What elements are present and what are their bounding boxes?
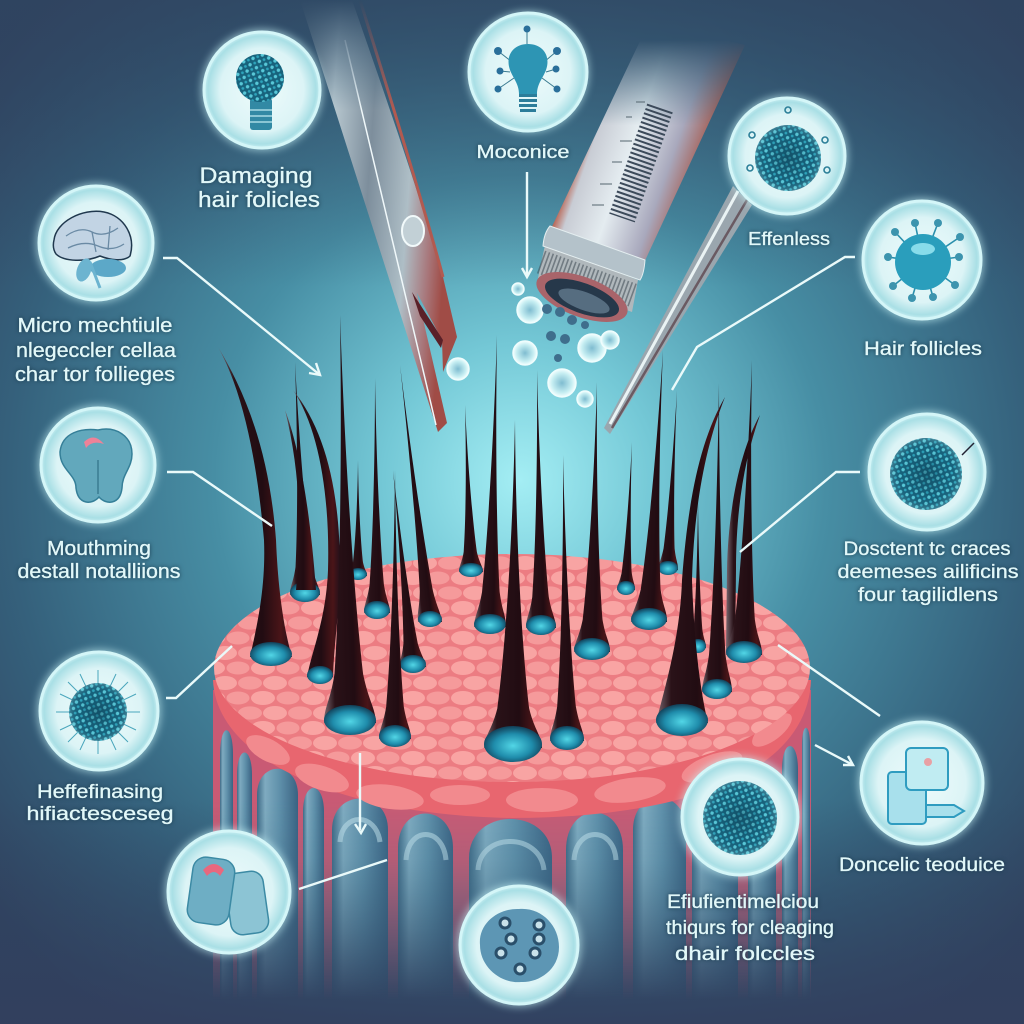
label: bottom centre text: Efiufientimelciou bbox=[667, 892, 819, 913]
callout: bulb-shaped fuzzy ball bbox=[201, 29, 323, 151]
callout: cell cluster bbox=[457, 883, 581, 1007]
label: left bottom text bbox=[26, 782, 174, 825]
icon: tissue lobes bbox=[60, 429, 132, 502]
label: micro molecule text bbox=[15, 315, 177, 386]
callout: fuzzy ball right bbox=[866, 411, 988, 533]
label: hair follicles: Hair follicles bbox=[864, 339, 982, 360]
label: bottom centre text: dhair folccles bbox=[675, 944, 815, 965]
label: mounting details: destall notalliions bbox=[18, 561, 180, 583]
syringe knurled nozzle bbox=[530, 245, 638, 332]
needle probe bbox=[604, 186, 752, 434]
label: micro molecule text: nlegeccler cellaa bbox=[16, 340, 177, 362]
icon: pads bbox=[186, 855, 270, 936]
label: right text block: four tagilidlens bbox=[858, 585, 998, 606]
callout: virus ball top right bbox=[726, 95, 848, 217]
icon: device bbox=[888, 748, 964, 824]
icon: fuzzy ball bbox=[890, 438, 974, 510]
icon: spiky ball bbox=[747, 107, 830, 191]
label: bottom centre text bbox=[666, 892, 834, 965]
label: right text block: deemeses ailificins bbox=[838, 562, 1018, 583]
icon: cell cluster bbox=[480, 909, 559, 982]
icon: sphere with nodes bbox=[884, 219, 964, 302]
icon: fuzzy bulb bbox=[236, 54, 284, 130]
label: micro molecule text: char tor follieges bbox=[15, 364, 175, 386]
icon: fuzzy ball bbox=[703, 781, 777, 855]
callout: pads bbox=[165, 828, 293, 956]
tweezers pivot bbox=[402, 216, 424, 246]
label: right text block: Dosctent tc craces bbox=[844, 539, 1010, 560]
callout: sphere with nodes bbox=[860, 198, 984, 322]
front row hairs bbox=[314, 315, 725, 762]
tweezers bbox=[300, 0, 457, 432]
syringe barrel bbox=[552, 44, 744, 260]
label: left bottom text: Heffefinasing bbox=[37, 782, 163, 803]
syringe bbox=[536, 44, 744, 322]
label: moconice: Moconice bbox=[476, 142, 570, 162]
label: bottom centre text: thiqurs for cleaging bbox=[666, 918, 834, 939]
connector arrows bbox=[163, 172, 880, 889]
syringe scale bbox=[592, 102, 660, 218]
skin surface bbox=[214, 554, 810, 782]
label: damaging hair follicles: Damaging bbox=[200, 163, 312, 188]
callout: device bbox=[858, 719, 986, 847]
rim cells bbox=[242, 707, 797, 814]
hair follicles bbox=[218, 315, 770, 762]
label: left bottom text: hifiactesceseg bbox=[26, 804, 174, 825]
callout: brain bbox=[36, 183, 156, 303]
skin cylinder with follicle columns bbox=[213, 554, 811, 1010]
callout: light bulb bbox=[467, 11, 589, 133]
icon: hairy ball bbox=[56, 670, 140, 754]
syringe collar bbox=[543, 226, 645, 280]
icon: brain bbox=[53, 211, 132, 288]
label: effenless: Effenless bbox=[748, 229, 830, 249]
callout: fuzzy ball bottom bbox=[679, 756, 801, 878]
bubbles and particles bbox=[447, 283, 619, 407]
skin rim bbox=[213, 680, 811, 818]
label: mounting details bbox=[18, 538, 180, 583]
label: damaging hair follicles bbox=[198, 163, 320, 212]
label: doncelic teoduice: Doncelic teoduice bbox=[839, 855, 1005, 876]
label: mounting details: Mouthming bbox=[47, 538, 151, 560]
callout: hairy ball left bbox=[37, 649, 161, 773]
mid row hairs bbox=[218, 347, 734, 699]
back row hairs bbox=[280, 335, 770, 663]
label: micro molecule text: Micro mechtiule bbox=[18, 315, 172, 337]
label: damaging hair follicles: hair folicles bbox=[198, 187, 320, 212]
label: right text block bbox=[838, 539, 1018, 606]
callout: tooth-like tissue bbox=[38, 405, 158, 525]
follicle columns bbox=[213, 690, 811, 1010]
icon: light bulb with nodes bbox=[494, 26, 561, 112]
